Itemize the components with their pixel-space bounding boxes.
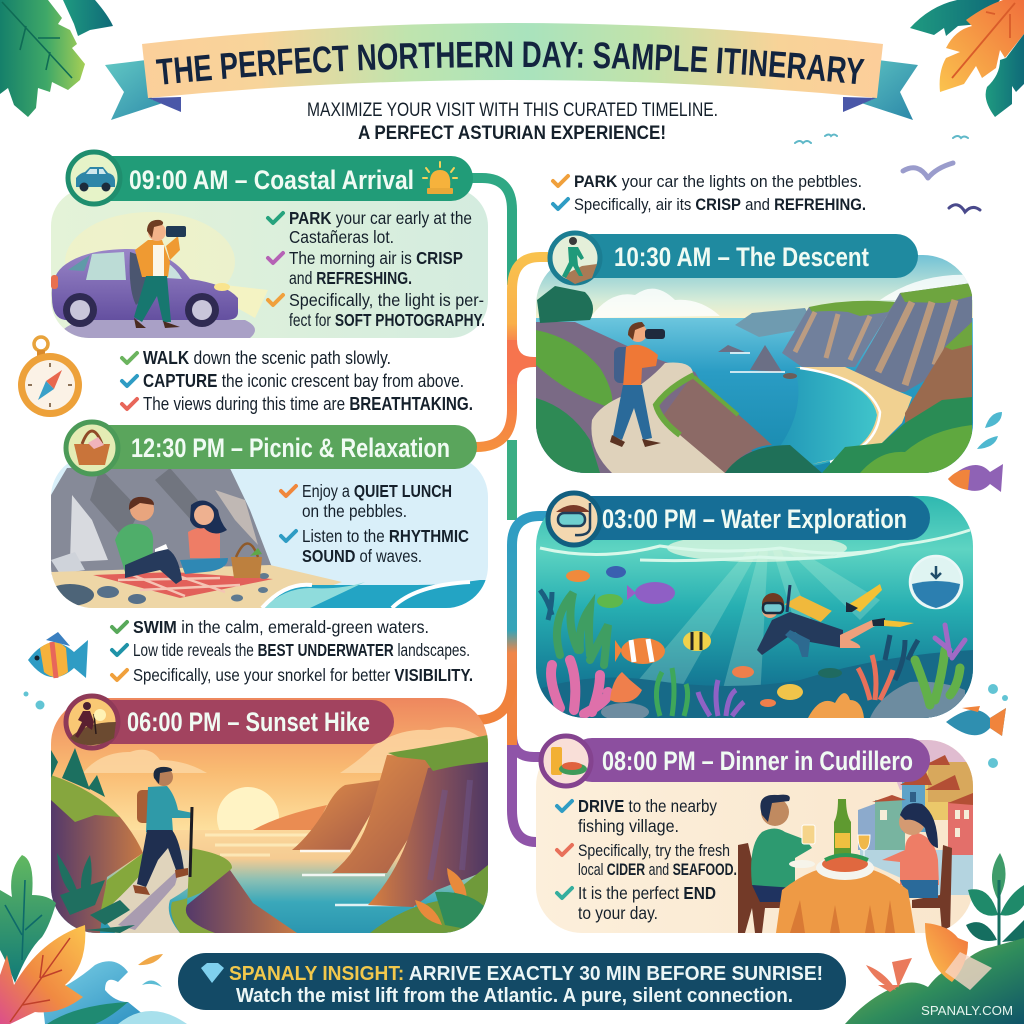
button: dive icon: [910, 556, 962, 608]
bullet list: local CIDER and SEAFOOD.: [578, 861, 737, 879]
panel: 09:00 coastal arrival: [51, 188, 488, 338]
icon: blue fish: [946, 706, 1006, 736]
list: top-right notes: PARK your car the lights on the pebtbles.: [574, 172, 862, 191]
bullet list: on the pebbles.: [302, 501, 407, 521]
icon: snorkel mask: [548, 493, 600, 545]
list: swim tips: Low tide reveals the BEST UNDERWATER landscapes.: [133, 640, 470, 660]
callout: Spanaly insight: Watch the mist lift from the Atlantic. A pure, silent connection.: [236, 985, 793, 1007]
header: 09:00 AM: 09:00 AM – Coastal Arrival: [129, 165, 414, 195]
list: 10:30 walk tips: [122, 348, 473, 414]
bullet list: to your day.: [578, 903, 658, 923]
illustration: picnic on the beach: [46, 462, 488, 608]
icon: hiker badge: [66, 696, 118, 748]
watermark: SPANALY.COM: [921, 1003, 1013, 1018]
list: 10:30 walk tips: WALK down the scenic path slowly.: [143, 348, 391, 368]
decoration: top-left leaves: [0, 0, 113, 117]
header: 12:30 PM: 12:30 PM – Picnic & Relaxation: [131, 433, 450, 463]
illustration: purple car and photographer: [51, 212, 268, 338]
panel: 12:30 picnic: [46, 455, 488, 608]
bullet list: Listen to the RHYTHMIC: [302, 526, 469, 546]
icon: car badge: [68, 152, 120, 204]
callout: Spanaly insight: [178, 953, 846, 1010]
callout: Spanaly insight: SPANALY INSIGHT: ARRIVE EXACTLY 30 MIN BEFORE SUNRISE!: [229, 962, 823, 985]
header: 09:00 AM: [68, 152, 473, 204]
header: 10:30 AM: [550, 233, 918, 284]
title ribbon: [105, 23, 918, 120]
list: swim tips: [112, 617, 473, 685]
bullet list: It is the perfect END: [578, 883, 716, 903]
subtitle: MAXIMIZE YOUR VISIT WITH THIS CURATED TIMELINE.: [307, 100, 718, 121]
bullet list: DRIVE to the nearby: [578, 796, 717, 816]
title text: THE PERFECT NORTHERN DAY: SAMPLE ITINERARY: [156, 42, 865, 84]
compass: [18, 337, 82, 417]
timeline connector: [470, 178, 548, 842]
decoration: water drops: [977, 412, 1002, 449]
illustration: dinner by the harbour: [738, 740, 973, 933]
bullet list: [268, 208, 485, 330]
illustration: underwater reef and diver: [536, 496, 973, 721]
header: 08:00 PM: 08:00 PM – Dinner in Cudillero: [602, 746, 913, 776]
list: top-right notes: [553, 172, 866, 214]
decoration: bottom-left foliage: [0, 855, 187, 1024]
icon: tropical fish left: [28, 632, 88, 678]
header: 08:00 PM: [541, 736, 930, 786]
list: 10:30 walk tips: CAPTURE the iconic crescent bay from above.: [143, 371, 464, 391]
list: swim tips: Specifically, use your snorkel for better VISIBILITY.: [133, 665, 473, 685]
icon: beer and seafood: [541, 736, 591, 786]
bullet list: [281, 481, 469, 566]
header: 06:00 PM: 06:00 PM – Sunset Hike: [127, 707, 370, 737]
decoration: bottom-right foliage: [845, 853, 1024, 1024]
panel: 06:00 sunset hike: [51, 696, 488, 933]
bullet list: The morning air is CRISP: [289, 248, 463, 268]
bullet list: Enjoy a QUIET LUNCH: [302, 481, 452, 501]
icon: diamond: [201, 963, 224, 983]
bullet list: Castañeras lot.: [289, 227, 394, 247]
panel: 08:00 dinner: [536, 736, 973, 933]
illustration: cliffs and crescent bay: [536, 255, 973, 473]
decoration: top-right leaves: [910, 0, 1024, 117]
subtitle: [307, 100, 718, 144]
list: swim tips: SWIM in the calm, emerald-green waters.: [133, 617, 429, 637]
bullet list: Specifically, the light is per-: [289, 290, 484, 310]
icon: walker badge: [550, 233, 600, 284]
panel: 10:30 descent: [536, 233, 973, 473]
subtitle: A PERFECT ASTURIAN EXPERIENCE!: [358, 123, 666, 144]
illustration: sunset cliffs and hiker: [51, 698, 488, 933]
header: 06:00 PM: [66, 696, 394, 748]
bullet list: [557, 796, 737, 923]
header: 10:30 AM: 10:30 AM – The Descent: [614, 242, 869, 272]
list: top-right notes: Specifically, air its CRISP and REFREHING.: [574, 195, 866, 214]
bullet list: SOUND of waves.: [302, 546, 422, 566]
header: 03:00 PM: [548, 493, 930, 545]
bullet list: fect for SOFT PHOTOGRAPHY.: [289, 310, 485, 330]
birds: [795, 134, 980, 212]
icon: picnic basket: [66, 422, 118, 474]
panel: 03:00 water exploration: [536, 493, 973, 721]
icon: tropical fish right: [948, 464, 1003, 492]
header: 03:00 PM: 03:00 PM – Water Exploration: [602, 504, 907, 534]
bullet list: and REFRESHING.: [289, 268, 412, 288]
bullet list: fishing village.: [578, 816, 679, 836]
list: 10:30 walk tips: The views during this time are BREATHTAKING.: [143, 394, 473, 414]
decoration: bubbles: [24, 684, 1008, 768]
bullet list: Specifically, try the fresh: [578, 842, 730, 860]
bullet list: PARK your car early at the: [289, 208, 472, 228]
icon: beacon light: [423, 162, 457, 194]
header: 12:30 PM: [66, 422, 477, 474]
